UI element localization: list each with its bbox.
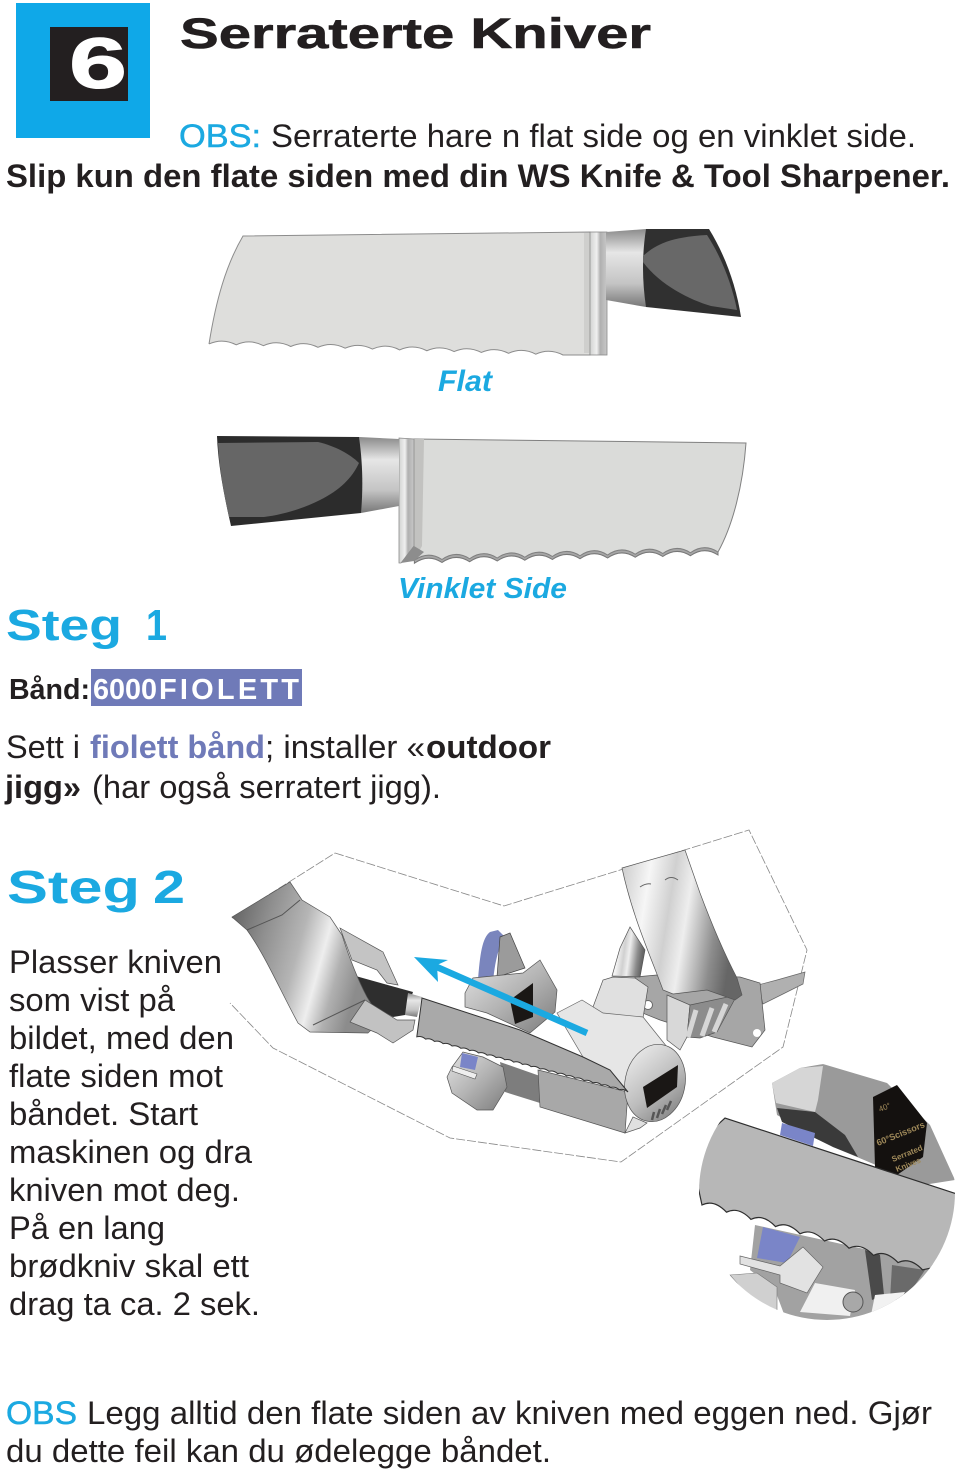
right hand [622, 850, 742, 1050]
step 2 text: brødkniv skal ett [9, 1248, 249, 1284]
cord [758, 972, 805, 1004]
gold-on-black label: 60°Scissors [875, 1119, 926, 1148]
band label [9, 669, 302, 706]
heading: step 2 [7, 861, 185, 913]
illustration: knife, flat side [209, 229, 741, 355]
knife ferrule [405, 993, 422, 1017]
front housing [557, 1000, 667, 1095]
knife handle [352, 975, 413, 1017]
step 2 text [9, 944, 260, 1322]
heading: step 2: 2 [153, 861, 185, 913]
heading: step 1 [6, 601, 167, 650]
intro text: OBS: [179, 118, 261, 154]
lower guide [447, 1052, 507, 1110]
guide label [510, 983, 533, 1024]
step 2 text: bildet, med den [9, 1020, 234, 1056]
step 2 text: som vist på [9, 982, 176, 1018]
step 1 text: fiolett bånd [90, 729, 265, 765]
label: flat: Flat [438, 365, 494, 398]
closing note [6, 1395, 932, 1469]
title: Serraterte Kniver [180, 10, 651, 58]
belt pivot arm [497, 933, 525, 977]
heading: step 1: 1 [146, 601, 167, 650]
heading: step 1: Steg [6, 601, 122, 650]
icon: step number badge [16, 3, 150, 138]
upper housing [593, 977, 648, 1018]
upper blue belt [780, 1123, 815, 1146]
knife blade [417, 998, 628, 1092]
step 2 text: På en lang [9, 1210, 165, 1246]
close-up blade [690, 1118, 960, 1270]
step 2 text: båndet. Start [9, 1096, 198, 1132]
gold-on-black label: 40° [877, 1101, 892, 1114]
step 2 text: kniven mot deg. [9, 1172, 240, 1208]
lower belt and pin [452, 1053, 478, 1079]
step 1 text: outdoor [426, 729, 551, 765]
step 1 text: Sett i [6, 729, 80, 765]
illustration: machine with hands and knife [230, 830, 807, 1162]
intro text: Serraterte hare n flat side og en vinklet side. [271, 118, 916, 154]
closing note: Legg alltid den flate siden av kniven med eggen ned. Gjør [87, 1395, 932, 1431]
icon: step number badge: 6 [69, 25, 127, 104]
gold-on-black label [873, 1085, 927, 1175]
intro text: Slip kun den flate siden med din WS Knife & Tool Sharpener. [6, 158, 950, 194]
closing note: du dette feil kan du ødelegge båndet. [6, 1433, 551, 1469]
central mechanism [500, 1062, 540, 1103]
arrow [414, 957, 587, 1033]
step 2 text: flate siden mot [9, 1058, 223, 1094]
intro text [6, 118, 950, 194]
heading: step 2: Steg [7, 861, 140, 913]
gold-on-black label: Knives [894, 1155, 923, 1174]
machine rear block [635, 975, 765, 1047]
step 1 text: ; installer « [265, 729, 425, 765]
left hand [232, 882, 415, 1043]
right thumb [612, 927, 645, 977]
band label: 6000 [93, 674, 157, 706]
lower box [538, 1070, 628, 1133]
label: angled side: Vinklet Side [398, 573, 567, 605]
closing note: OBS [6, 1395, 77, 1431]
step 1 text: (har også serratert jigg). [92, 769, 441, 805]
illustration: circular close-up [690, 1064, 960, 1330]
band label: Bånd: [9, 674, 90, 706]
step 1 text [4, 729, 551, 805]
step 1 text: jigg» [4, 769, 81, 805]
motor end cap [618, 1039, 692, 1133]
step 2 text: Plasser kniven [9, 944, 222, 980]
band label: FIOLETT [159, 674, 299, 706]
lower machine parts [730, 1225, 933, 1320]
upper machine housing [772, 1064, 955, 1185]
upper blue belt [478, 930, 505, 982]
upper guide [465, 960, 557, 1033]
step 2 text: maskinen og dra [9, 1134, 253, 1170]
step 2 text: drag ta ca. 2 sek. [9, 1286, 260, 1322]
gold-on-black label: Serrated [890, 1143, 924, 1164]
illustration: knife, angled side [217, 436, 746, 563]
